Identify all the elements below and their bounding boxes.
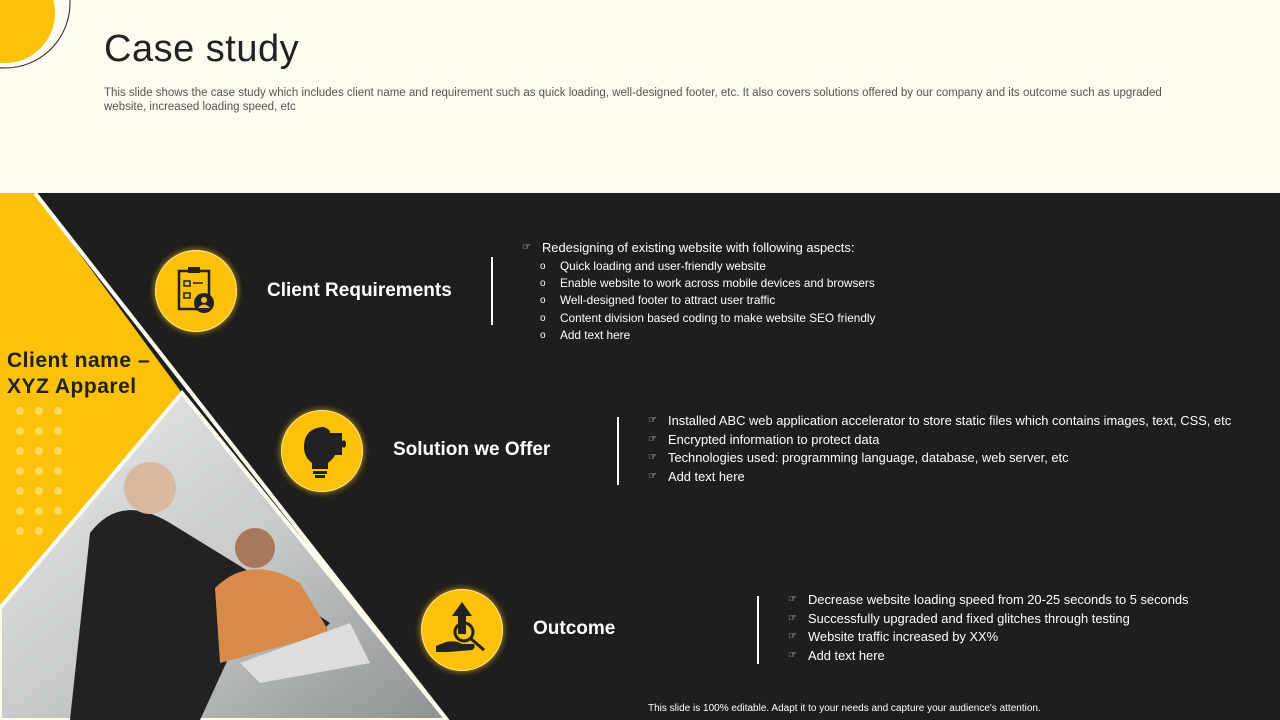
- dark panel background: [0, 193, 1280, 720]
- list: solution: Installed ABC web application accelerator to store static files which contains images, text, CSS, etc: [668, 413, 1231, 428]
- heading: solution we offer: Solution we Offer: [393, 439, 550, 460]
- list: outcome: Successfully upgraded and fixed glitches through testing: [808, 611, 1130, 626]
- list: solution: Technologies used: programming language, database, web server, etc: [668, 450, 1069, 465]
- client name: [7, 349, 150, 398]
- heading: client requirements: Client Requirements: [267, 280, 452, 301]
- icon: clipboard: [155, 250, 237, 332]
- client name: XYZ Apparel: [7, 375, 137, 398]
- list: client requirements: Add text here: [560, 328, 630, 342]
- list: client requirements: Enable website to work across mobile devices and browsers: [560, 276, 875, 290]
- description: This slide shows the case study which includes client name and requirement such as quick loading, well-designed footer, etc. It also covers solutions offered by our company and its outcome such as upgraded website, increased loading speed, etc: [104, 87, 1162, 113]
- list: client requirements: Redesigning of existing website with following aspects:: [542, 240, 854, 255]
- list: solution: Add text here: [668, 469, 745, 484]
- heading: outcome: Outcome: [533, 618, 615, 639]
- list: client requirements: [522, 240, 876, 342]
- list: solution: Encrypted information to protect data: [668, 432, 879, 447]
- list: client requirements: Well-designed footer to attract user traffic: [560, 293, 775, 307]
- client name: Client name –: [7, 349, 150, 372]
- list: outcome: Website traffic increased by XX%: [808, 629, 998, 644]
- footer note: This slide is 100% editable. Adapt it to your needs and capture your audience's attention.: [648, 703, 1041, 714]
- title: Case study: [104, 28, 299, 70]
- icon: growth hand: [421, 589, 503, 671]
- list: outcome: [788, 592, 1189, 663]
- list: outcome: Add text here: [808, 648, 885, 663]
- list: outcome: Decrease website loading speed from 20-25 seconds to 5 seconds: [808, 592, 1189, 607]
- decoration: top-left circles: [0, 0, 70, 68]
- icon: bulb puzzle: [281, 410, 363, 492]
- list: solution: [648, 413, 1231, 484]
- list: client requirements: Quick loading and user-friendly website: [560, 259, 766, 273]
- list: client requirements: Content division based coding to make website SEO friendly: [560, 311, 875, 325]
